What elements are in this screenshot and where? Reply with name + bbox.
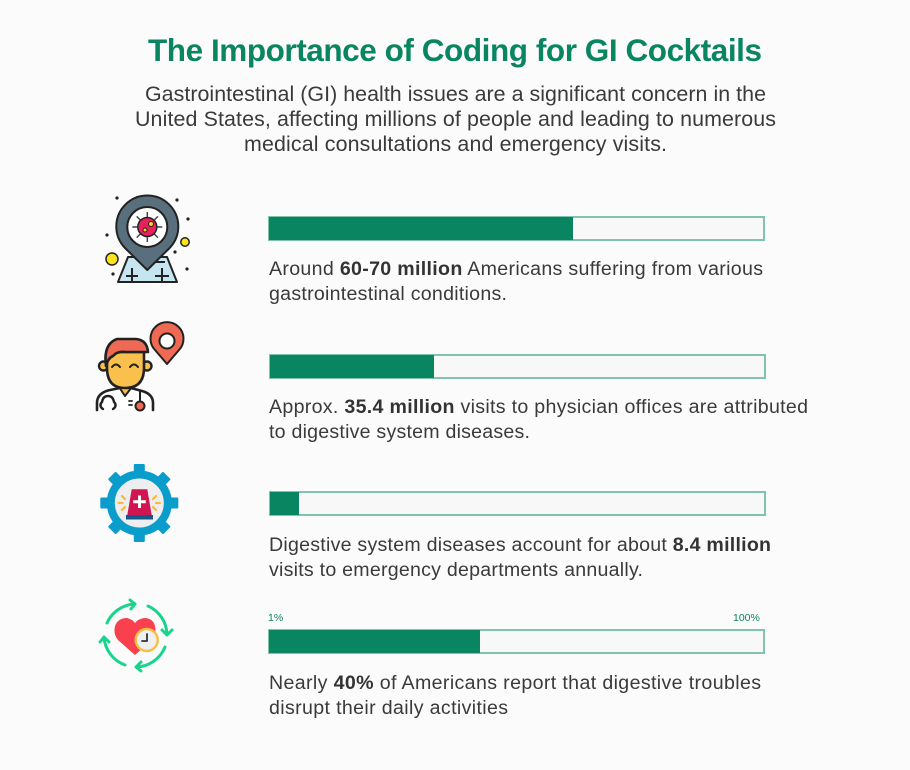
text: 40 percent: Nearly 40% of Americans report that digestive troubles — [269, 672, 761, 694]
intro paragraph: United States, affecting millions of people and leading to numerous — [135, 107, 776, 131]
bar: 8.4 million — [270, 492, 765, 515]
icon: emergency siren in gear — [100, 464, 178, 542]
icon: virus location pin — [105, 195, 190, 282]
text: 8.4 million — [269, 534, 771, 581]
bar: 60-70 million — [269, 217, 764, 240]
text: 60-70 million: Around 60-70 million Americans suffering from various — [269, 258, 763, 280]
text: 40 percent — [269, 672, 761, 719]
title: The Importance of Coding for GI Cocktails — [148, 32, 762, 68]
intro paragraph: Gastrointestinal (GI) health issues are a significant concern in the — [145, 82, 766, 106]
scale labels — [268, 612, 760, 624]
intro paragraph: medical consultations and emergency visits. — [244, 132, 667, 156]
text: 35.4 million — [269, 396, 808, 443]
icon: heart with clock and cycle arrows — [100, 600, 172, 671]
text: 35.4 million: Approx. 35.4 million visits to physician offices are attributed — [269, 396, 808, 418]
text: 8.4 million: visits to emergency departments annually. — [269, 559, 643, 581]
scale labels: 100% — [733, 612, 760, 624]
text: 40 percent: disrupt their daily activities — [269, 697, 508, 719]
intro paragraph — [135, 82, 776, 156]
bar: 35.4 million — [270, 355, 765, 378]
scale labels: 1% — [268, 612, 283, 624]
text: 60-70 million — [269, 258, 763, 305]
text: 60-70 million: gastrointestinal conditions. — [269, 283, 507, 305]
bar: 40 percent — [269, 630, 764, 653]
text: 8.4 million: Digestive system diseases account for about 8.4 million — [269, 534, 771, 556]
icon: doctor with location pin — [97, 322, 184, 410]
text: 35.4 million: to digestive system diseases. — [269, 421, 530, 443]
